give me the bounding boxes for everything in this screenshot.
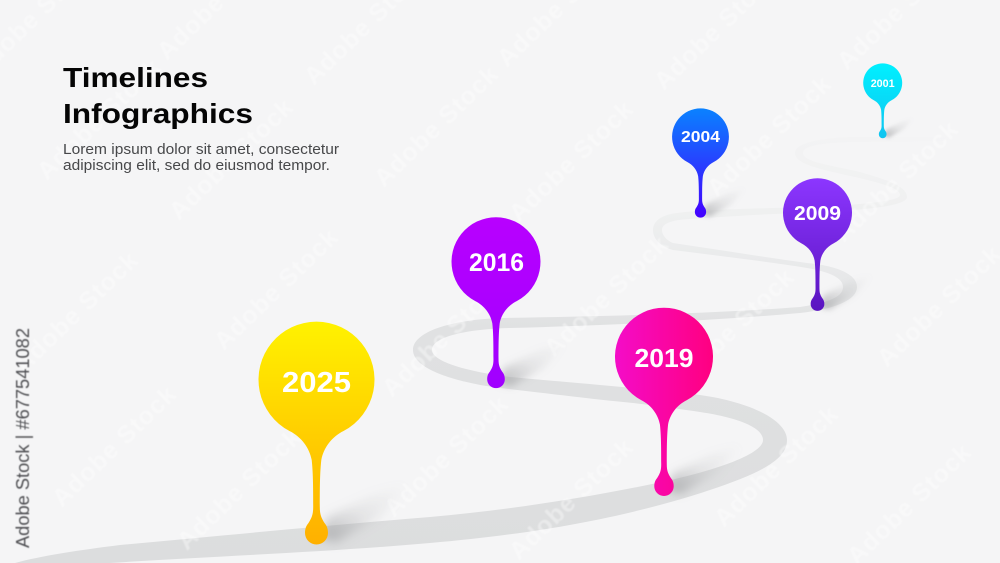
pin: 2025: 2025 — [282, 367, 351, 399]
watermark: Adobe Stock — [829, 115, 964, 247]
pin: 2001 — [863, 63, 914, 138]
title: Timelines — [63, 62, 208, 93]
watermark: Adobe Stock — [702, 70, 837, 202]
watermark: Adobe Stock — [504, 95, 639, 227]
watermark: Adobe Stock — [32, 53, 167, 185]
watermark: Adobe Stock — [379, 390, 514, 522]
title: Infographics — [63, 98, 253, 129]
watermark: Adobe Stock — [172, 423, 307, 555]
description: adipiscing elit, sed do eiusmod tempor. — [63, 158, 330, 174]
pin: 2001: 2001 — [871, 78, 895, 90]
watermark: Adobe Stock — [9, 246, 144, 378]
watermark: Adobe Stock — [665, 263, 800, 395]
pin: 2016: 2016 — [469, 249, 524, 277]
watermark: Adobe Stock — [164, 93, 299, 225]
watermark: Adobe Stock — [709, 400, 844, 532]
watermark: Adobe Stock — [47, 380, 182, 512]
watermark: Adobe Stock — [539, 230, 674, 362]
winding road — [15, 130, 970, 563]
watermark: Adobe Stock — [377, 270, 512, 402]
watermark: Adobe Stock — [504, 433, 639, 563]
pin: 2004 — [672, 108, 746, 218]
pin: 2009 — [783, 178, 872, 311]
side credit: Adobe Stock | #677541082 — [13, 328, 33, 548]
pin: 2016 — [452, 217, 567, 388]
pin: 2004: 2004 — [681, 129, 720, 146]
pin: 2009: 2009 — [794, 203, 841, 225]
title — [63, 62, 253, 129]
pin: 2025 — [258, 322, 408, 544]
pin: 2019: 2019 — [634, 343, 694, 373]
watermark: Adobe Stock — [209, 223, 344, 355]
pin: 2019 — [615, 308, 742, 496]
description: Lorem ipsum dolor sit amet, consectetur — [63, 142, 339, 158]
description — [63, 142, 339, 174]
watermark: Adobe Stock — [369, 60, 504, 192]
